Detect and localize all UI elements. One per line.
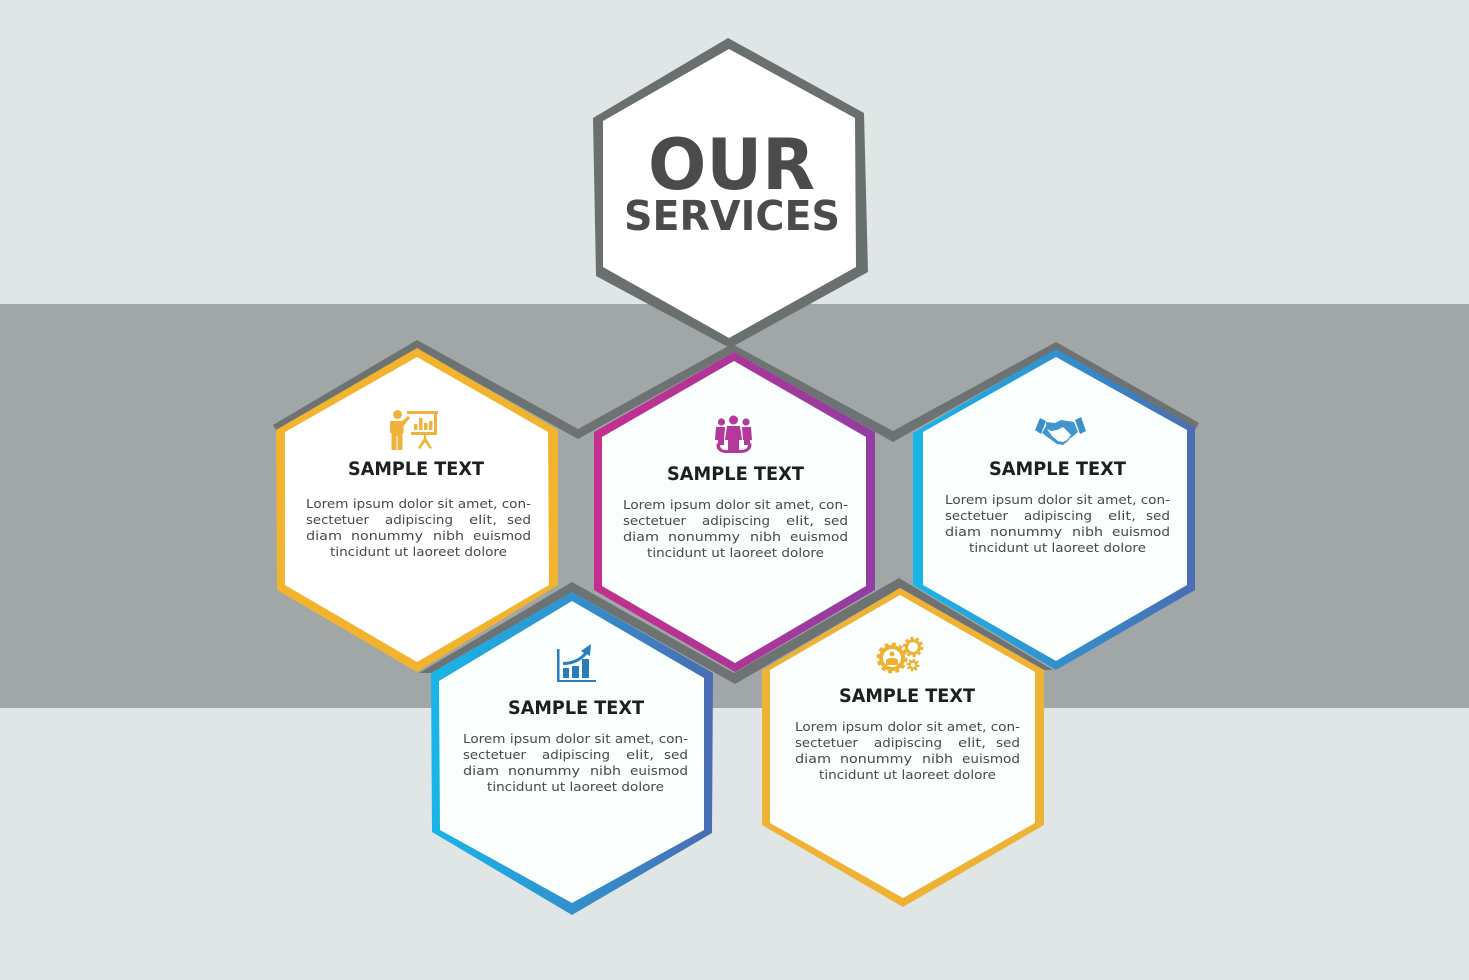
icon: growth chart [557, 644, 596, 682]
icon: team of people [715, 416, 752, 453]
title: SERVICES: SERVICES [624, 192, 840, 240]
heading: SAMPLE TEXT [667, 463, 804, 485]
body text [623, 497, 848, 560]
upper grey chevron behind hexagons [273, 340, 1199, 442]
panel: yellow hexagon, gears [762, 588, 1044, 907]
panel: blue hexagon, handshake [913, 349, 1195, 670]
icon: gears with person [878, 638, 922, 672]
icon: presenter with board [390, 410, 438, 450]
icon: handshake [1035, 417, 1086, 445]
lower grey chevron over upper hexagons [419, 578, 1053, 684]
panel: magenta hexagon, team [594, 352, 875, 672]
panel: blue hexagon, growth chart [431, 592, 713, 915]
body text [795, 719, 1020, 782]
body text [945, 492, 1170, 555]
heading: SAMPLE TEXT [839, 685, 975, 707]
heading: SAMPLE TEXT [989, 458, 1126, 480]
heading: SAMPLE TEXT [508, 697, 644, 719]
panel: yellow hexagon, presenter [276, 348, 558, 672]
heading: SAMPLE TEXT [348, 458, 484, 480]
body text [306, 496, 531, 559]
grey horizontal band [0, 304, 1469, 708]
body text [463, 731, 688, 794]
title hexagon [593, 38, 868, 348]
title: OUR: OUR [648, 124, 815, 206]
